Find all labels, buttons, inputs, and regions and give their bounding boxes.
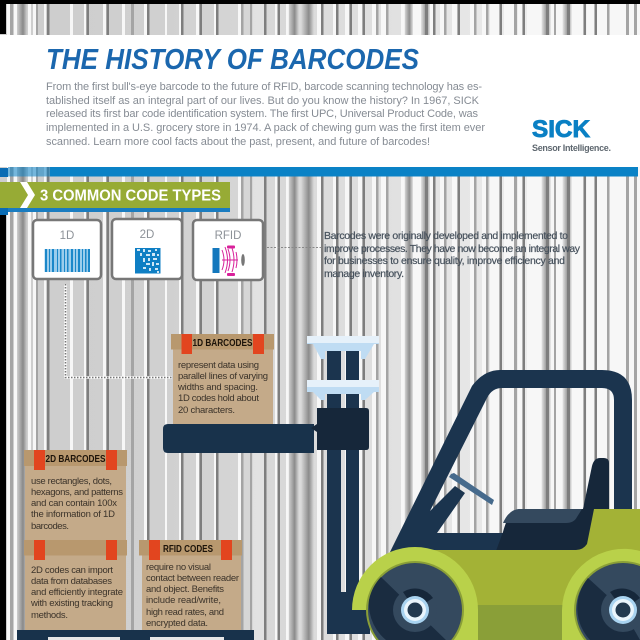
body lower panel bbox=[470, 605, 570, 640]
box: RFID codes: require no visual bbox=[146, 562, 211, 573]
SICK logo: SICK bbox=[532, 116, 591, 143]
box: 1D barcodes: widths and spacing. bbox=[177, 382, 258, 393]
box: RFID codes: encrypted data. bbox=[146, 618, 208, 629]
box: RFID codes: contact between reader bbox=[146, 573, 239, 584]
box: RFID codes: include read/write, bbox=[146, 595, 221, 606]
box: 1D barcodes: 1D codes hold about bbox=[178, 393, 259, 404]
front wheel bbox=[352, 547, 478, 640]
blue divider band, translucent left part bbox=[8, 167, 50, 176]
box: RFID codes: and object. Benefits bbox=[146, 584, 224, 595]
body bbox=[390, 509, 640, 640]
box: 2D barcodes continued: and efficiently integrate bbox=[31, 587, 123, 598]
icon: RFID reader waves bbox=[212, 246, 245, 276]
box: 1D barcodes: 1D BARCODES bbox=[192, 338, 253, 349]
card: 2D bbox=[112, 219, 182, 279]
purpose text block bbox=[324, 230, 581, 280]
rear wheel bbox=[562, 549, 640, 640]
box: 2D barcodes continued: methods. bbox=[31, 610, 68, 621]
icon: 1D barcode bbox=[44, 249, 90, 272]
mast columns behind carriage bbox=[327, 394, 359, 408]
card: RFID bbox=[193, 220, 263, 280]
left black edge, lower bbox=[0, 215, 6, 640]
light fork upper bbox=[307, 336, 379, 359]
title: THE HISTORY OF BARCODES bbox=[46, 44, 420, 76]
dotted connector: 1D to box bbox=[66, 284, 172, 378]
box: 2D barcodes continued bbox=[24, 540, 127, 630]
box: 1D barcodes: 20 characters. bbox=[178, 405, 235, 416]
intro paragraph: scanned. Learn more cool facts about the past, present, and future of barcodes! bbox=[46, 136, 430, 148]
top black edge bbox=[0, 0, 640, 4]
header panel bbox=[0, 35, 640, 167]
purpose text block: Barcodes were originally developed and implemented to bbox=[324, 230, 568, 242]
dotted connector: RFID to text bbox=[267, 246, 323, 248]
card: 1D: 1D bbox=[60, 230, 74, 242]
cabin frame bbox=[390, 370, 632, 552]
section banner: 3 common code types: 3 COMMON CODE TYPES bbox=[40, 188, 221, 204]
box: RFID codes: RFID CODES bbox=[163, 544, 213, 555]
box: 2D barcodes: 2D BARCODES bbox=[46, 454, 106, 465]
intro paragraph: implemented in a U.S. grocery store in 1974. A pack of chewing gum was the first item ever bbox=[46, 122, 485, 134]
icon: 2D data matrix bbox=[135, 248, 160, 274]
SICK logo bbox=[532, 116, 611, 153]
card: RFID: RFID bbox=[215, 230, 241, 242]
fork arm bbox=[163, 424, 314, 453]
box: 1D barcodes: represent data using bbox=[178, 360, 259, 371]
box: 2D barcodes bbox=[24, 450, 127, 541]
forklift bbox=[163, 336, 640, 640]
box: 2D barcodes continued: 2D codes can import bbox=[31, 565, 113, 576]
intro paragraph: released its first bar code identification system. The first UPC, Universal Product Code, was bbox=[46, 108, 478, 120]
box: 2D barcodes: hexagons, and patterns bbox=[31, 487, 123, 498]
intro paragraph: tablished itself as an integral part of our lives. But do you know the history? In 1967, SICK bbox=[46, 95, 480, 107]
left black edge, upper bbox=[0, 0, 6, 34]
box: 2D barcodes: and can contain 100x bbox=[31, 498, 117, 509]
intro paragraph: From the first bull's-eye barcode to the future of RFID, barcode scanning technology has es- bbox=[46, 81, 482, 93]
box: RFID codes bbox=[139, 540, 242, 630]
intro paragraph bbox=[46, 81, 485, 148]
SICK logo: Sensor Intelligence. bbox=[532, 143, 611, 153]
steering wheel bbox=[449, 473, 494, 505]
section banner: 3 common code types bbox=[0, 168, 230, 215]
box: 2D barcodes continued: with existing tracking bbox=[30, 598, 113, 609]
box: 2D barcodes continued: data from databases bbox=[31, 576, 112, 587]
box: 2D barcodes: use rectangles, dots, bbox=[31, 476, 112, 487]
card: 2D: 2D bbox=[140, 229, 154, 241]
box: 2D barcodes: barcodes. bbox=[31, 521, 69, 532]
mast columns bbox=[327, 350, 370, 634]
box: 2D barcodes: the information of 1D bbox=[31, 509, 115, 520]
purpose text block: manage inventory. bbox=[324, 268, 404, 280]
blue divider band bbox=[50, 167, 638, 176]
dotted connector overlay: 1D to box bbox=[66, 284, 172, 378]
box: RFID codes: high read rates, and bbox=[146, 607, 224, 618]
seat bbox=[496, 458, 609, 551]
carriage bbox=[311, 408, 369, 450]
light fork lower bbox=[307, 380, 379, 400]
pallet bbox=[17, 630, 254, 640]
card: 1D bbox=[33, 220, 101, 279]
box: 1D barcodes: parallel lines of varying bbox=[178, 371, 268, 382]
purpose text block: improve processes. They have now become an integral way bbox=[324, 243, 581, 255]
box: 1D barcodes bbox=[171, 334, 274, 424]
purpose text block: for businesses to ensure quality, improve efficiency and bbox=[324, 255, 565, 267]
